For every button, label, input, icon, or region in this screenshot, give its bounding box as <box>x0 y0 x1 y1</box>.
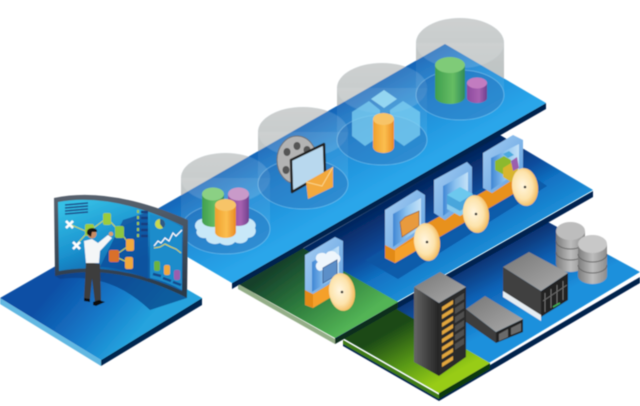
green database <box>202 188 224 227</box>
disc 1 <box>326 271 358 313</box>
curved touch screen <box>54 195 188 298</box>
purple database <box>467 78 487 103</box>
middle layer green zone <box>238 247 398 338</box>
mini databases <box>153 261 181 285</box>
box: folder application <box>385 190 425 263</box>
bottom layer: infrastructure <box>343 222 640 401</box>
middle layer: applications <box>238 135 593 344</box>
disc 4 <box>509 166 541 208</box>
shoes <box>84 298 105 306</box>
disk stack 1 <box>556 222 585 272</box>
line chart <box>154 230 182 253</box>
disc 3 <box>460 193 492 235</box>
translucent cubes <box>352 90 420 146</box>
tablet <box>291 144 325 192</box>
glass cylinder 2 with media icons <box>258 107 348 209</box>
conveyor base <box>365 166 547 279</box>
box: coloured cubes application <box>483 135 523 193</box>
hair <box>87 228 97 237</box>
big server <box>503 252 568 321</box>
pie chart <box>155 219 165 229</box>
legend list <box>137 210 139 238</box>
top layer: services <box>131 44 546 289</box>
bottom layer green zone <box>343 308 490 393</box>
server rack <box>414 272 466 376</box>
green database <box>435 57 465 104</box>
legs <box>84 262 101 303</box>
cloud <box>195 218 256 245</box>
glass cylinder backs above the top layer <box>181 18 504 229</box>
person touching the screen <box>84 228 113 306</box>
left platform <box>0 240 202 366</box>
box: cloud application <box>305 237 343 308</box>
orange conveyor <box>385 174 515 263</box>
orange database <box>215 199 236 238</box>
orange database <box>373 113 394 153</box>
glass cylinder 3 with cubes <box>337 63 427 165</box>
screen text lines <box>65 203 88 214</box>
box: stacked layers application <box>434 162 473 220</box>
film reel <box>277 136 317 184</box>
small server <box>466 296 523 343</box>
workflow cross icons <box>66 221 80 249</box>
hand <box>109 232 113 236</box>
workflow links <box>69 218 130 263</box>
workflow nodes <box>85 213 134 269</box>
head <box>88 230 96 238</box>
disk stack 2 <box>578 235 607 284</box>
purple database <box>228 188 249 226</box>
glass cylinder 4 with databases <box>416 18 504 120</box>
envelope <box>306 167 333 199</box>
shirt and arm <box>84 235 112 263</box>
disc 2 <box>411 221 443 263</box>
glass cylinder 1 with cloud and databases <box>181 153 270 254</box>
